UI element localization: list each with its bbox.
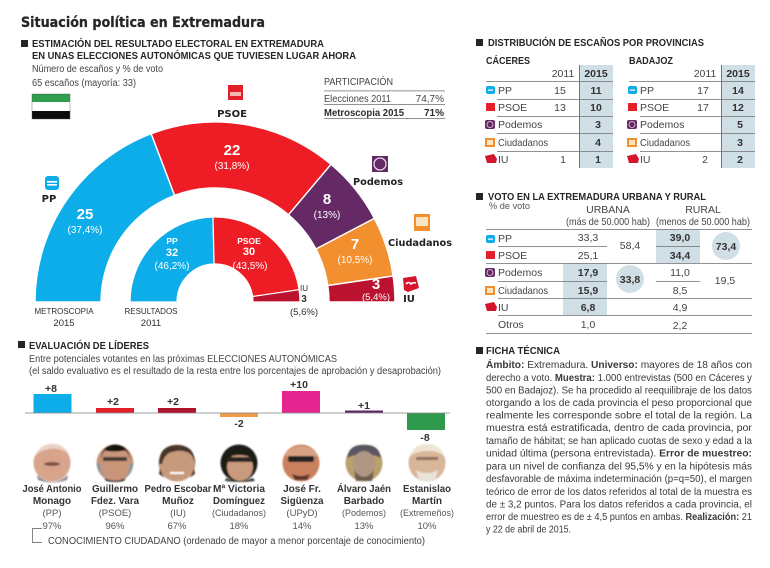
heading: leader evaluation: EVALUACIÓN DE LÍDERES — [29, 339, 149, 352]
table: Badajoz: 17 — [697, 102, 709, 114]
table: vote by area: 34,4 — [670, 250, 690, 262]
table: vote by area: 25,1 — [578, 250, 598, 262]
table: Badajoz: PSOE — [640, 102, 669, 114]
icon: Extremadura flag — [32, 94, 70, 119]
text block: methodology: desfavorable de máxima indeterminación (p=q=50), el margen — [486, 474, 752, 485]
leader: Mª Victoria Domínguez: Domínguez — [213, 496, 265, 507]
leader: Mª Victoria Domínguez: Mª Victoria — [213, 484, 265, 495]
caption: Metroscopia 2015: 2015 — [53, 318, 75, 329]
participation table: PARTICIPACIÓN — [324, 75, 393, 88]
text block: methodology: y 22 de abril de 2015. — [486, 524, 571, 536]
text block: methodology: Ámbito: Extremadura. Universo: mayores de 18 años con — [486, 358, 752, 371]
table: vote by area: 73,4 — [716, 241, 736, 253]
leader: Álvaro Jaén Barbado: Álvaro Jaén — [337, 482, 391, 495]
table: vote by area: 15,9 — [578, 285, 598, 297]
text block: methodology — [486, 358, 753, 536]
panel: electoral estimate — [21, 37, 452, 329]
leader: Álvaro Jaén Barbado: Barbado — [344, 496, 384, 507]
column headers: % de voto — [489, 201, 530, 212]
party label: PP: PP — [42, 194, 56, 205]
chart labels: 2015 values: (13%) — [314, 210, 340, 221]
chart labels: 2015 values: 3 — [372, 276, 380, 293]
table: Badajoz: 3 — [737, 137, 743, 149]
party label: PSOE: PSOE — [217, 109, 247, 120]
subtitle: 65 escaños (mayoría: 33) — [32, 78, 136, 89]
table: vote by area — [485, 229, 752, 334]
participation table: Elecciones 2011 — [324, 94, 391, 105]
heading: electoral estimate: ESTIMACIÓN DEL RESULTADO ELECTORAL EN EXTREMADURA — [32, 37, 324, 50]
subtitle: Número de escaños y % de voto — [32, 64, 163, 75]
leader: Pedro Escobar Muñoz: Muñoz — [162, 496, 194, 507]
caption: Metroscopia 2015: METROSCOPIA — [34, 307, 94, 316]
leader: Guillermo Fdez. Vara: Fdez. Vara — [91, 496, 139, 507]
caption: Resultados 2011 — [124, 307, 178, 329]
chart labels: 2011 values: 30 — [243, 246, 255, 258]
table: Badajoz: Ciudadanos — [640, 137, 690, 149]
leader: José Fr. Sigüenza: José Fr. — [283, 484, 321, 495]
participation table — [324, 75, 445, 119]
chart labels: 2011 values: PSOE — [237, 236, 261, 246]
table: Cáceres — [485, 54, 613, 168]
leader: Álvaro Jaén Barbado: (Podemos) — [342, 508, 386, 519]
table: Cáceres: Ciudadanos — [498, 137, 548, 149]
bar chart: evaluation balance: +1 — [358, 400, 370, 412]
leader: José Antonio Monago — [22, 444, 82, 532]
party label: Ciudadanos — [388, 214, 452, 249]
leader: Mª Victoria Domínguez — [212, 444, 266, 532]
leader: Estanislao Martín: Martín — [412, 496, 442, 507]
table: vote by area: 39,0 — [670, 232, 690, 244]
column headers: (menos de 50.000 hab) — [656, 216, 750, 228]
panel: technical data — [476, 344, 753, 536]
leader: Guillermo Fdez. Vara: Guillermo — [92, 484, 138, 495]
chart labels: 2011 values: IU — [300, 284, 308, 293]
leader: Mª Victoria Domínguez: 18% — [229, 521, 249, 532]
table: Cáceres: PSOE — [498, 102, 527, 114]
table: Cáceres: IU — [498, 154, 508, 166]
table: vote by area: 11,0 — [670, 267, 690, 279]
bar chart: evaluation balance: +2 — [167, 396, 179, 408]
table: Badajoz: 2015 — [726, 68, 750, 80]
table: Badajoz: BADAJOZ — [629, 55, 673, 67]
table: Cáceres: 15 — [554, 85, 566, 97]
table: Cáceres: 3 — [595, 119, 601, 131]
table: Badajoz: 2 — [702, 154, 708, 166]
chart labels: 2015 values: (31,8%) — [214, 161, 250, 172]
party label: PSOE — [217, 85, 247, 120]
table: vote by area: 17,9 — [578, 267, 598, 279]
table: Cáceres: 4 — [595, 137, 601, 149]
chart: Metroscopia 2015 hemicycle — [35, 122, 395, 302]
leader: Estanislao Martín — [400, 444, 454, 532]
subtitle: Entre potenciales votantes en las próximas ELECCIONES AUTONÓMICAS — [29, 352, 337, 365]
heading: electoral estimate — [21, 37, 356, 62]
table: Cáceres: 2015 — [584, 68, 608, 80]
title: Situación política en Extremadura — [21, 15, 265, 31]
table: Cáceres: 1 — [560, 154, 566, 166]
chart labels: 2011 values: 3 — [301, 294, 307, 305]
party label: PP — [42, 176, 59, 205]
chart labels: 2015 values: (10,5%) — [337, 255, 373, 266]
chart labels: 2015 values: 25 — [77, 206, 93, 223]
leader: José Fr. Sigüenza: 14% — [292, 521, 312, 532]
table: vote by area: 4,9 — [673, 302, 687, 314]
party label: IU — [403, 276, 419, 305]
table: vote by area: Ciudadanos — [498, 285, 548, 297]
leader: Pedro Escobar Muñoz: Pedro Escobar — [144, 484, 212, 495]
leader: Estanislao Martín: 10% — [417, 521, 437, 532]
table: Cáceres: CÁCERES — [486, 54, 530, 67]
table: vote by area: 1,0 — [581, 319, 595, 331]
table: vote by area: 2,2 — [673, 320, 687, 332]
panel: seats by province — [476, 36, 755, 168]
table: Cáceres: 11 — [590, 85, 602, 97]
column headers: (más de 50.000 hab) — [566, 216, 650, 228]
table: Badajoz: Podemos — [640, 119, 684, 131]
leader: José Fr. Sigüenza: Sigüenza — [280, 496, 324, 507]
text block: methodology: de ± 3,2 puntos. Para los datos referidos a cada provincia, el — [486, 500, 752, 510]
chart labels: 2011 values: (5,6%) — [290, 307, 318, 318]
table: vote by area: 19,5 — [715, 275, 735, 287]
heading: electoral estimate: EN UNAS ELECCIONES AUTONÓMICAS QUE TUVIESEN LUGAR AHORA — [32, 49, 356, 62]
leader: Álvaro Jaén Barbado: 13% — [354, 521, 374, 532]
table: Cáceres: 10 — [590, 102, 602, 114]
leader: José Fr. Sigüenza: (UPyD) — [286, 508, 318, 519]
table: vote by area: Otros — [498, 319, 524, 331]
table: vote by area: PP — [498, 233, 512, 245]
table: Cáceres: 1 — [595, 154, 601, 166]
text block: methodology: 500 en Badajoz). Se ha procedido al reequilibraje de los datos — [486, 386, 752, 396]
table: Badajoz: 12 — [732, 102, 744, 114]
chart labels: 2011 values: PP — [166, 236, 178, 246]
leader: José Antonio Monago: Monago — [33, 496, 71, 507]
leader: Álvaro Jaén Barbado — [337, 444, 391, 532]
leader: Guillermo Fdez. Vara — [91, 444, 139, 532]
table: vote by area: IU — [498, 302, 508, 314]
leader: Estanislao Martín: Estanislao — [403, 484, 451, 495]
leader: José Antonio Monago: (PP) — [42, 508, 62, 519]
leader: Pedro Escobar Muñoz: 67% — [167, 521, 187, 532]
chart labels: 2015 values: (37,4%) — [67, 225, 103, 236]
table: vote by area: 6,8 — [581, 302, 595, 314]
chart: Resultados 2011 hemicycle — [130, 217, 300, 302]
table: vote by area: PSOE — [498, 250, 527, 262]
table: Cáceres: Podemos — [498, 119, 542, 131]
table: Badajoz: 17 — [697, 85, 709, 97]
caption: Resultados 2011: 2011 — [141, 318, 161, 329]
participation table: Metroscopia 2015 — [324, 108, 404, 119]
leader: Mª Victoria Domínguez: (Ciudadanos) — [212, 508, 266, 519]
table: vote by area: Podemos — [498, 267, 542, 279]
party label: Podemos: Podemos — [353, 177, 403, 188]
bar chart: evaluation balance: +10 — [290, 379, 308, 391]
panel: leader evaluation — [18, 339, 454, 547]
leader: Pedro Escobar Muñoz — [144, 444, 212, 532]
chart labels: 2011 values: (43,5%) — [232, 261, 268, 272]
table: Badajoz: 2 — [737, 154, 743, 166]
table: Badajoz: IU — [640, 154, 650, 166]
text block: methodology: unidad última (persona entrevistada). Error de muestreo: — [486, 448, 752, 460]
leader: Guillermo Fdez. Vara: 96% — [105, 521, 125, 532]
bar chart: evaluation balance: -2 — [234, 418, 244, 430]
heading: technical data: FICHA TÉCNICA — [486, 344, 560, 357]
chart labels: 2011 values — [154, 236, 318, 318]
chart labels: 2015 values: 22 — [224, 142, 240, 159]
column headers — [489, 201, 750, 228]
text block: methodology: muestra está estratificada, dentro de cada provincia, por — [486, 423, 753, 434]
subtitle: (el saldo evaluativo es el resultado de la resta entre los porcentajes de aprobación y desaprobación) — [29, 366, 441, 377]
bar chart: evaluation balance: +8 — [45, 383, 57, 395]
chart labels: 2011 values: 32 — [166, 247, 178, 259]
panel: urban and rural vote — [476, 191, 752, 334]
leader: José Antonio Monago: José Antonio — [22, 484, 82, 495]
chart labels: 2015 values: 8 — [323, 191, 331, 208]
table: Badajoz — [627, 55, 755, 168]
text block: methodology: realmente les corresponde sobre el total de la región. La — [486, 410, 752, 422]
table: vote by area: 33,8 — [620, 274, 640, 286]
text block: methodology: para un nivel de confianza del 95,5% y en la hipótesis más — [486, 462, 752, 472]
text block: methodology: tamaño de hábitat; se han aplicado cuotas de sexo y edad a la — [486, 436, 752, 447]
party label: IU: IU — [403, 294, 415, 305]
table: vote by area: 58,4 — [620, 240, 640, 252]
table: Badajoz: 14 — [732, 85, 744, 97]
table: Cáceres: PP — [498, 85, 512, 97]
text block: methodology: teórico de error de los datos referidos al total de la muestra es — [486, 487, 752, 498]
leader: José Fr. Sigüenza — [280, 444, 324, 532]
chart labels: 2015 values — [67, 142, 390, 303]
participation table: 74,7% — [416, 94, 444, 105]
table: Badajoz: 2011 — [694, 68, 716, 80]
subtitle — [29, 352, 441, 377]
text block: methodology: derecho a voto. Muestra: 1.000 entrevistas (500 en Cáceres y — [486, 373, 752, 384]
party label: Ciudadanos: Ciudadanos — [388, 238, 452, 249]
bar chart: evaluation balance — [25, 379, 450, 444]
party label: Podemos — [353, 156, 403, 188]
column headers: RURAL — [685, 204, 721, 216]
bar chart: evaluation balance: +2 — [107, 396, 119, 408]
chart labels: 2015 values: 7 — [351, 236, 359, 253]
chart labels: 2015 values: (5,4%) — [362, 292, 390, 303]
column headers: URBANA — [586, 204, 630, 216]
participation table: 71% — [424, 108, 444, 119]
table: vote by area: 8,5 — [673, 285, 687, 297]
text block: methodology: otorgando a los de cada provincia el peso proporcional que — [486, 398, 752, 409]
bar chart: evaluation balance: -8 — [420, 432, 430, 444]
note: citizen awareness: CONOCIMIENTO CIUDADANO (ordenado de mayor a menor porcentaje de conocimiento) — [48, 536, 425, 547]
note: citizen awareness — [32, 528, 425, 547]
heading: seats by province: DISTRIBUCIÓN DE ESCAÑOS POR PROVINCIAS — [488, 36, 704, 49]
caption: Metroscopia 2015 — [34, 307, 94, 329]
table: Cáceres: 2011 — [552, 68, 574, 80]
table: Badajoz: PP — [640, 85, 654, 97]
caption: Resultados 2011: RESULTADOS — [124, 307, 178, 316]
table: Badajoz: 5 — [737, 119, 743, 131]
leader: José Antonio Monago: 97% — [42, 521, 62, 532]
subtitle — [32, 64, 163, 89]
heading: urban and rural vote: VOTO EN LA EXTREMADURA URBANA Y RURAL — [488, 191, 707, 203]
leader: Guillermo Fdez. Vara: (PSOE) — [99, 508, 131, 519]
chart labels: 2011 values: (46,2%) — [154, 261, 190, 272]
table: Cáceres: 13 — [554, 102, 566, 114]
leader: Estanislao Martín: (Extremeños) — [400, 508, 454, 519]
leader: Pedro Escobar Muñoz: (IU) — [170, 508, 186, 519]
table: vote by area: 33,3 — [578, 232, 598, 244]
text block: methodology: error de muestreo es de ± 4,5 puntos en ambas. Realización: 21 — [486, 512, 752, 523]
